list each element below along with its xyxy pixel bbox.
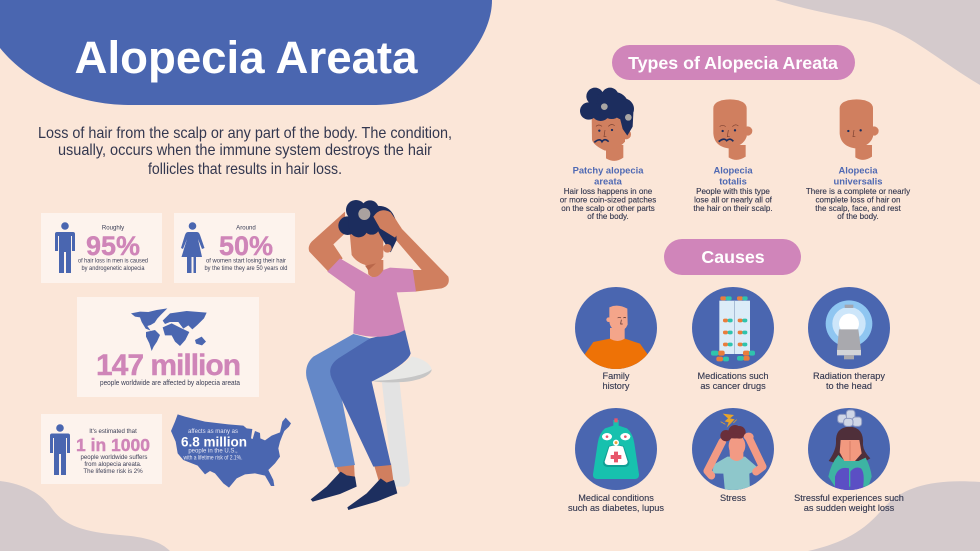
type: patchy alopecia areata: Hair loss happens in one (564, 187, 653, 196)
intro text: follicles that results in hair loss. (148, 161, 342, 178)
stat card: 147 million: people worldwide are affected by alopecia areata (100, 378, 240, 387)
illustration: person holding head on stool (306, 200, 449, 510)
type: patchy alopecia areata: Patchy alopecia (573, 164, 644, 176)
neck and face (349, 228, 383, 277)
type: patchy alopecia areata: of the body. (587, 212, 629, 221)
hair back strand (375, 206, 397, 252)
type: alopecia totalis: People with this type (696, 187, 770, 196)
circle icon: MRI scanner (808, 287, 890, 369)
stat card: 50% of women: of women start losing their hair (206, 258, 286, 264)
stat card: 95% of men (41, 213, 162, 283)
type: alopecia totalis: totalis (719, 176, 747, 186)
intro text: Loss of hair from the scalp or any part of the body. The condition, (38, 125, 452, 142)
circle icon: stressed person (692, 408, 774, 492)
type: patchy alopecia areata: or more coin-sized patches (560, 196, 656, 204)
USA map with stat (171, 414, 291, 488)
heading pill: Causes: Causes (701, 247, 765, 267)
stat card: 95% of men: 95% (86, 231, 140, 261)
circle icon: medical bottle (575, 408, 657, 490)
title banner (0, 0, 492, 105)
cause: medications: Medications such (698, 371, 768, 381)
type: alopecia universalis (806, 99, 910, 221)
USA map with stat: with a lifetime risk of 2.1%. (183, 456, 243, 462)
icon: man (50, 424, 70, 475)
intro text: usually, occurs when the immune system destroys the hair (58, 142, 432, 159)
stat card: 1 in 1000: It's estimated that (89, 428, 137, 435)
background blob: bottom left (0, 481, 170, 551)
heading pill: Causes (664, 239, 801, 275)
bald head (840, 99, 879, 160)
hair patch (358, 208, 370, 220)
stat card: 147 million (77, 297, 259, 397)
type: alopecia totalis: lose all or nearly all of (694, 196, 773, 204)
cause: medical conditions (568, 408, 664, 513)
circle icon: pill packs (692, 287, 774, 369)
cause: stress: Stress (720, 493, 746, 503)
type: alopecia totalis (693, 99, 773, 213)
cause: radiation therapy: Radiation therapy (813, 371, 885, 381)
stat card: 95% of men: by androgenetic alopecia (82, 265, 145, 272)
upper body (309, 200, 449, 337)
type: patchy alopecia areata: on the scalp or other parts (561, 204, 655, 213)
type: patchy alopecia areata: areata (594, 176, 623, 186)
hand (373, 210, 402, 238)
stat card: 50% of women: Around (236, 224, 256, 232)
head with patches (580, 88, 634, 161)
type: alopecia universalis: There is a complete or nearly (806, 187, 910, 196)
stat card: 95% of men: of hair loss in men is caused (78, 258, 148, 264)
type: alopecia universalis: universalis (834, 176, 882, 186)
type: alopecia totalis: Alopecia (713, 164, 753, 176)
cause: radiation therapy: to the head (826, 381, 872, 391)
background blob: top right (775, 0, 980, 85)
cause: stressful experiences: as sudden weight loss (804, 503, 895, 513)
stat card: 50% of women: by the time they are 50 years old (204, 265, 288, 272)
type: alopecia universalis: complete loss of hair on (816, 196, 900, 204)
stat card: 1 in 1000: The lifetime risk is 2% (83, 468, 143, 475)
cause: family history (575, 287, 657, 391)
cause: medications (692, 287, 774, 391)
type: alopecia universalis: Alopecia (838, 164, 878, 176)
cause: medical conditions: such as diabetes, lupus (568, 503, 664, 513)
cause: stress (692, 408, 774, 503)
cause: medications: as cancer drugs (700, 381, 766, 391)
stat card: 50% of women: 50% (219, 231, 273, 261)
stool (372, 357, 432, 487)
stat card: 1 in 1000: people worldwide suffers (81, 454, 147, 461)
cause: family history: history (602, 381, 630, 391)
shirt (327, 258, 416, 337)
world map (131, 308, 207, 351)
cause: medical conditions: Medical conditions (578, 493, 654, 503)
type: alopecia universalis: of the body. (837, 212, 879, 221)
stat card: 50% of women (174, 213, 295, 283)
arms (309, 210, 449, 292)
hair (338, 200, 380, 237)
bald head with moustache (713, 99, 752, 160)
type: alopecia universalis: the scalp, face, and rest (815, 204, 901, 213)
stat card: 1 in 1000: 1 in 1000 (76, 435, 150, 455)
stat card: 1 in 1000: from alopecia areata. (84, 461, 142, 468)
icon: woman (181, 222, 204, 273)
ear (383, 244, 392, 253)
type: alopecia totalis: the hair on their scalp. (693, 204, 773, 213)
ankles (336, 463, 394, 485)
title: Alopecia Areata (75, 32, 418, 83)
USA map with stat: people in the U.S., (188, 448, 238, 454)
stat card: 1 in 1000 (41, 414, 162, 484)
cause: stressful experiences (794, 408, 904, 513)
cause: stressful experiences: Stressful experiences such (794, 493, 904, 503)
circle icon: man (575, 287, 657, 369)
cause: radiation therapy (808, 287, 890, 391)
cause: family history: Family (602, 371, 630, 381)
stat card: 147 million: 147 million (96, 349, 240, 382)
stat card: 95% of men: Roughly (102, 224, 125, 232)
legs (306, 330, 411, 467)
USA map with stat: affects as many as (188, 429, 238, 435)
USA map with stat: 6.8 million (181, 434, 247, 450)
shoes (311, 472, 397, 510)
type: patchy alopecia areata (560, 88, 656, 221)
background blob: bottom right (808, 481, 980, 551)
circle icon: worried woman (808, 408, 890, 492)
heading pill: Types of Alopecia Areata: Types of Alopecia Areata (628, 53, 838, 73)
heading pill: Types of Alopecia Areata (612, 45, 855, 80)
icon: man (55, 222, 75, 273)
intro text (38, 125, 452, 178)
